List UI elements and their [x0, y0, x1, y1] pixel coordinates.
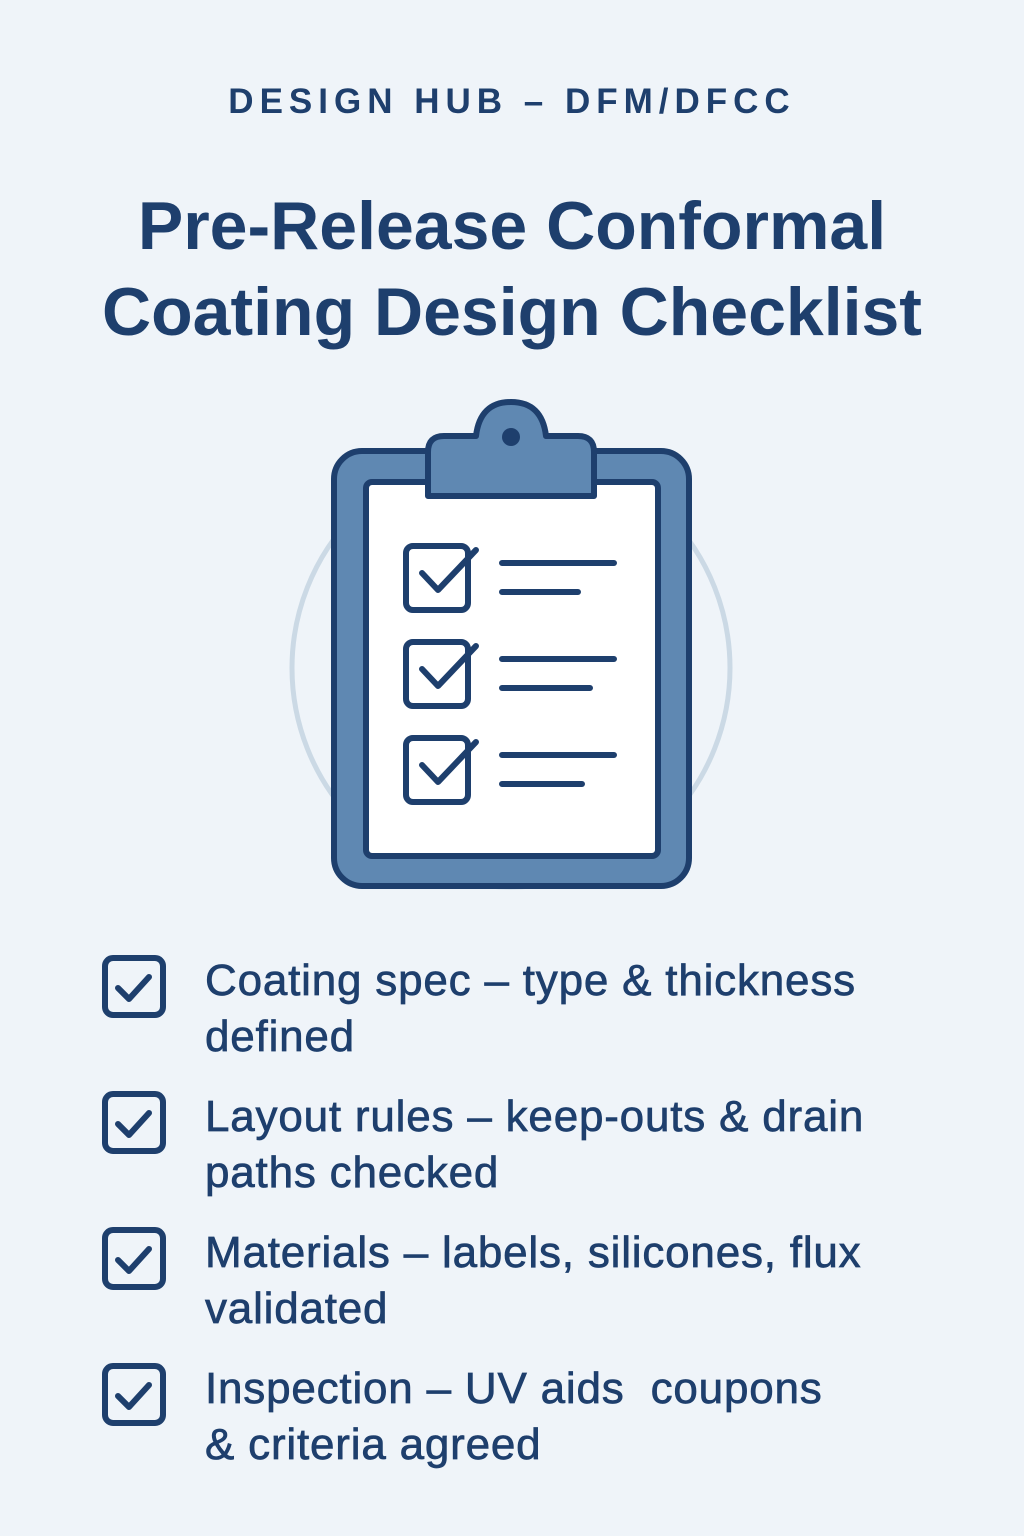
item 3: Materials – labels, silicones, flux	[205, 1228, 861, 1277]
subtitle: DESIGN HUB – DFM/DFCC	[228, 82, 796, 121]
item 2: Layout rules – keep-outs & drain	[205, 1092, 864, 1141]
item 1: Coating spec – type & thickness	[205, 956, 856, 1005]
title	[102, 188, 922, 350]
title: Coating Design Checklist	[102, 274, 922, 350]
item 4: & criteria agreed	[205, 1420, 541, 1469]
item 2	[102, 1091, 864, 1197]
item 2: paths checked	[205, 1148, 499, 1197]
item 4: Inspection – UV aids coupons	[205, 1364, 823, 1413]
item 3: validated	[205, 1284, 388, 1333]
item 1: defined	[205, 1012, 355, 1061]
item 4	[102, 1363, 823, 1469]
item 3	[102, 1227, 861, 1333]
icon: clipboard	[290, 399, 732, 890]
title: Pre-Release Conformal	[138, 188, 886, 264]
item 1	[102, 955, 856, 1061]
